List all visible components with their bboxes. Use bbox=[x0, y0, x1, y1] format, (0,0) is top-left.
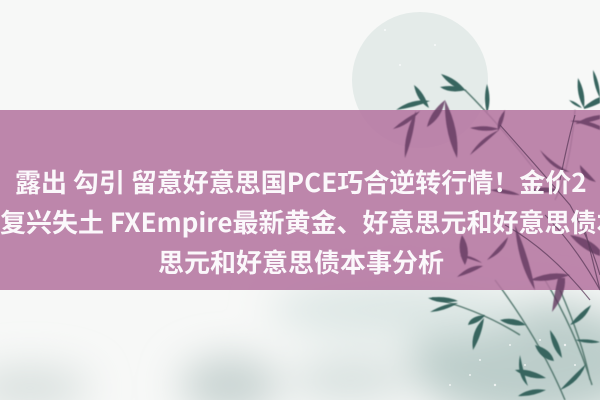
bamboo leaves bbox=[396, 70, 600, 396]
title band bbox=[0, 110, 600, 290]
moon bbox=[352, 12, 488, 148]
mist speckles bbox=[384, 29, 576, 386]
title text bbox=[0, 163, 600, 280]
bamboo stems bbox=[432, 90, 592, 400]
title line 3: 思元和好意思债本事分析 bbox=[158, 243, 444, 280]
title line 1: 露出 勾引 留意好意思国PCE巧合逆转行情！金价2 bbox=[15, 163, 587, 200]
